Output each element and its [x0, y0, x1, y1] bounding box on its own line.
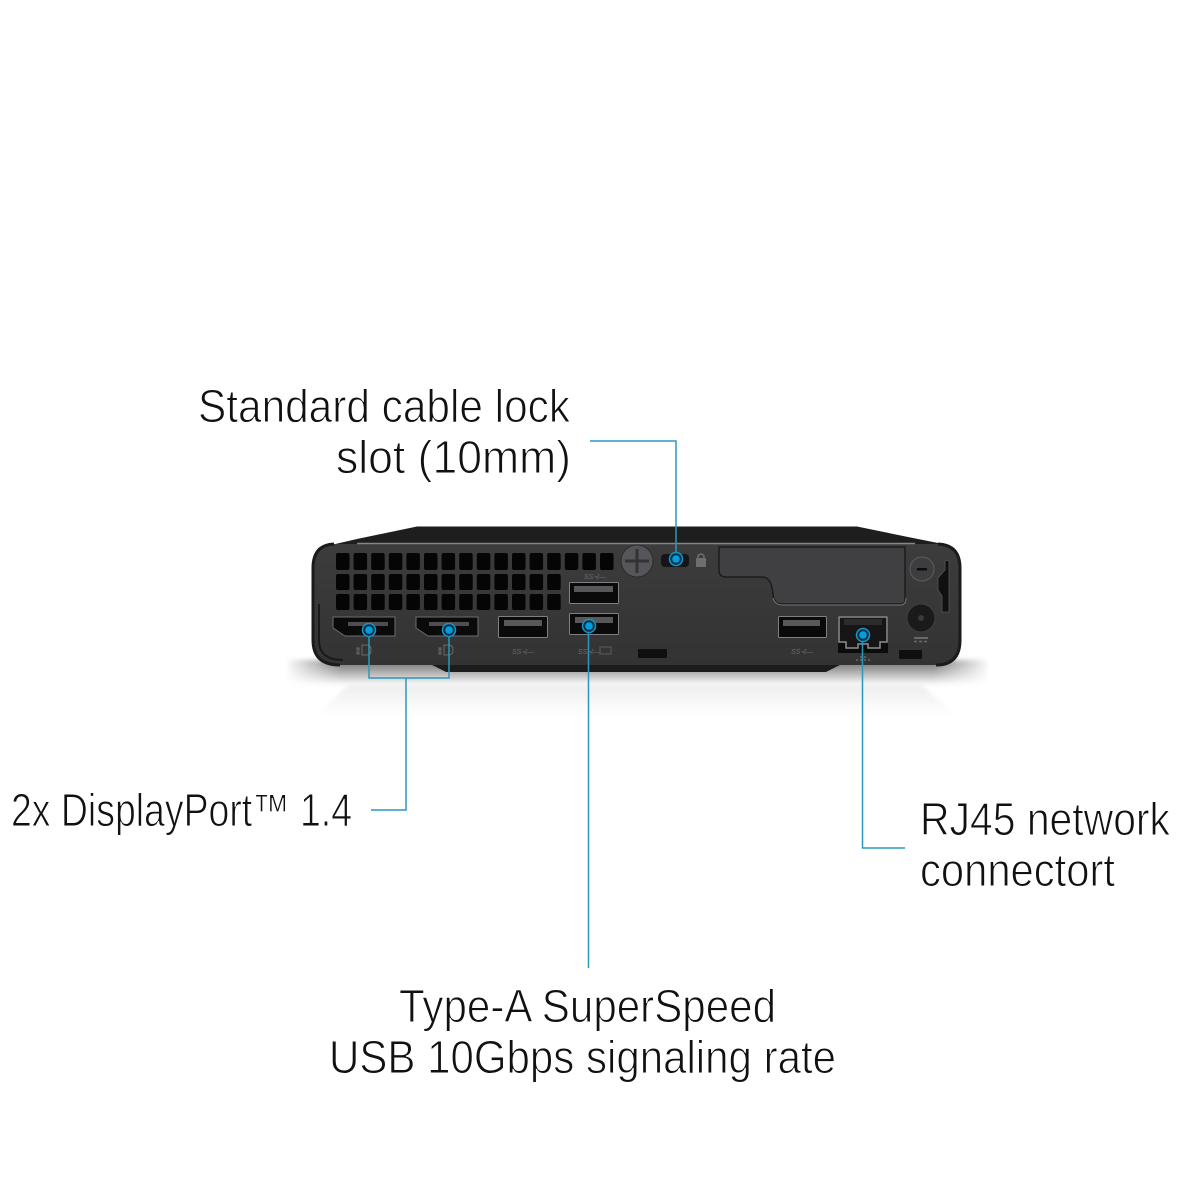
label: USB: USB 10Gbps signaling rate: [329, 1031, 836, 1083]
label: cable lock: [198, 380, 571, 483]
stacked USB port top: SS⊰—: [584, 574, 607, 581]
label: RJ45: RJ45 network: [920, 793, 1171, 845]
small vent slot: [899, 650, 922, 659]
leader: cable lock: [590, 441, 682, 566]
label: cable lock: slot (10mm): [336, 431, 571, 483]
vent grid: [336, 553, 614, 610]
label: USB: [329, 980, 836, 1083]
label: USB: Type-A SuperSpeed: [399, 980, 776, 1032]
DisplayPort port 2: [416, 617, 478, 655]
floor shadow: [289, 657, 986, 701]
small slot: [638, 649, 667, 658]
leader: USB: [582, 620, 596, 968]
stacked USB port bottom: SS⊰—: [578, 649, 601, 656]
power jack: [907, 604, 935, 642]
USB port right: [778, 616, 826, 656]
leader: DisplayPort: [362, 624, 456, 810]
RJ45 port: [838, 616, 888, 660]
label: RJ45: [920, 793, 1171, 896]
label: cable lock: Standard cable lock: [198, 380, 571, 432]
leader: RJ45: [856, 628, 905, 848]
USB port 1: SS⊰—: [512, 649, 535, 656]
label: RJ45: connectort: [920, 844, 1115, 896]
infographic canvas: [13, 389, 1169, 1082]
underside foot: [422, 660, 850, 672]
label: DisplayPort: 2x DisplayPort™ 1.4: [11, 784, 352, 836]
mini desktop PC rear view: [313, 526, 960, 672]
round service button: [910, 557, 934, 581]
rear panel: [313, 544, 960, 665]
side slot: [938, 560, 949, 612]
USB port right: SS⊰—: [791, 649, 814, 656]
cable lock slot: [661, 554, 706, 567]
expansion cover: [719, 547, 905, 604]
DisplayPort port 1: [333, 617, 395, 655]
top of chassis: [318, 526, 955, 556]
USB port 1: [498, 616, 548, 656]
thumbscrew: [621, 545, 653, 577]
stacked USB port bottom: [570, 614, 618, 656]
stacked USB port top: [570, 574, 618, 604]
